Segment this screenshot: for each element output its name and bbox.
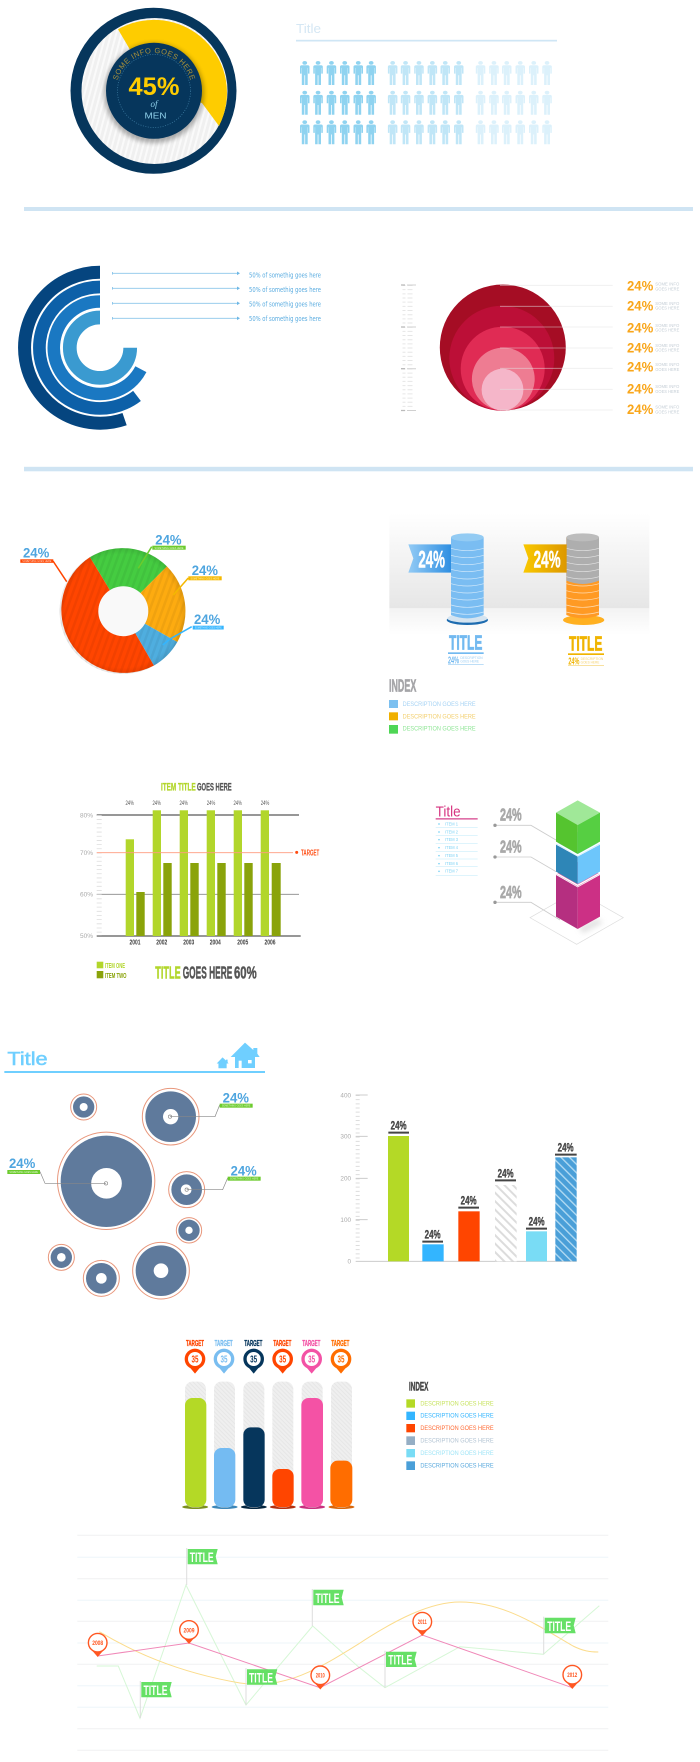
column values (391, 1118, 574, 1242)
green line (97, 1585, 599, 1718)
arc legend with arrows: 50% of somethig goes here (249, 315, 321, 323)
panel: yearly bar chart (80, 782, 319, 982)
blue ribbon (408, 544, 451, 574)
index legend: DESCRIPTION GOES HERE (420, 1426, 494, 1432)
axis: 200 (340, 1176, 351, 1183)
panel: isometric stack (436, 800, 623, 944)
target pins: 35 (250, 1355, 257, 1366)
index legend: INDEX (389, 675, 416, 695)
pink cube (556, 862, 600, 929)
callout: left: 24% (9, 1155, 36, 1171)
donut segments (60, 548, 186, 674)
percentage labels: 24% (627, 319, 654, 335)
percentage labels: 24% (627, 278, 654, 294)
leader lines (500, 285, 613, 410)
nested circles (440, 284, 566, 411)
index legend: DESCRIPTION GOES HERE (420, 1414, 494, 1420)
item list (436, 805, 478, 876)
flags: TITLE (144, 1682, 168, 1698)
index legend (406, 1380, 494, 1470)
stack labels: 24% (500, 836, 522, 856)
item list: Title (436, 805, 461, 821)
panel: concentric arc chart (25, 272, 321, 423)
target line: TARGET (301, 848, 319, 857)
year labels (130, 938, 276, 946)
flags: TITLE (547, 1618, 571, 1634)
index legend: DESCRIPTION GOES HERE (403, 702, 476, 708)
axis labels: 80% (80, 812, 93, 820)
label descriptions: SOME INFO (655, 384, 680, 390)
axis labels: 70% (80, 850, 93, 857)
big percentage: 45% (128, 73, 180, 101)
stack labels (500, 805, 522, 902)
green cube (555, 800, 601, 855)
bar values (125, 800, 269, 807)
target pins (185, 1349, 351, 1374)
target pins: 35 (337, 1355, 345, 1366)
of label: of (150, 99, 159, 109)
bubble holes (57, 1103, 193, 1284)
label descriptions: GOES HERE (655, 367, 679, 373)
yellow curve (99, 1602, 598, 1684)
callout: upper right: SOMETHING GOES HERE (222, 1104, 251, 1108)
label descriptions (655, 282, 680, 416)
men label: MEN (144, 112, 167, 120)
column values: 24% (529, 1215, 545, 1229)
percentage labels: 24% (627, 359, 654, 375)
backdrop (389, 513, 649, 635)
callout: orange: SOMETHING GOES HERE (190, 576, 220, 580)
year labels: 2004 (210, 938, 221, 946)
people group: medium (388, 61, 464, 144)
column values: 24% (498, 1166, 514, 1180)
label descriptions: SOME INFO (655, 405, 680, 411)
panel: men percentage ring (70, 8, 236, 174)
callout: right: SOMETHING GOES HERE (230, 1177, 259, 1181)
people group: light (476, 61, 552, 144)
pink line (98, 1635, 572, 1688)
bar bases (182, 1505, 354, 1509)
label descriptions: SOME INFO (655, 282, 680, 288)
index legend: DESCRIPTION GOES HERE (420, 1451, 494, 1457)
callout: blue: SOMETHING GOES HERE (195, 626, 222, 630)
label descriptions: GOES HERE (655, 389, 679, 395)
yellow ribbon (523, 544, 567, 574)
target line (97, 848, 319, 857)
callout: orange: 24% (192, 562, 219, 578)
year labels: 2001 (130, 938, 140, 946)
heading: Title (296, 22, 321, 36)
index legend: DESCRIPTION GOES HERE (403, 714, 476, 720)
flags: TITLE (249, 1669, 273, 1685)
blue title block: GOES HERE (460, 660, 479, 664)
ring: striped grey track (82, 18, 228, 164)
callout: red: 24% (23, 545, 50, 561)
bar values: 24% (125, 800, 134, 807)
target pins: 35 (220, 1355, 228, 1366)
timeline grid (77, 1535, 608, 1750)
panel: timeline line chart (77, 1535, 608, 1750)
bottom headline (155, 962, 257, 982)
target pins: 35 (308, 1355, 315, 1366)
target labels: TARGET (244, 1338, 262, 1348)
callout: upper right: 24% (223, 1090, 250, 1106)
year pins: 2009 (184, 1627, 195, 1634)
label descriptions: GOES HERE (655, 286, 679, 292)
index legend: DESCRIPTION GOES HERE (403, 727, 476, 733)
label descriptions: SOME INFO (655, 301, 680, 307)
leader lines (493, 824, 560, 920)
bubbles (51, 1091, 202, 1296)
percentage labels: 24% (627, 381, 654, 397)
callout: red: SOMETHING GOES HERE (22, 559, 51, 563)
blue title block (448, 631, 484, 666)
yellow title block: GOES HERE (581, 661, 600, 665)
axis labels: 50% (80, 933, 93, 940)
percentage labels: 24% (627, 297, 654, 313)
target pins: 35 (191, 1355, 199, 1366)
year pins: 2012 (567, 1672, 578, 1679)
column values: 24% (461, 1194, 477, 1208)
item list: ITEM 2 (445, 829, 459, 834)
axis: 300 (340, 1134, 351, 1141)
people group: dark (300, 61, 376, 144)
bar fills (185, 1398, 352, 1507)
item list: ITEM 3 (445, 837, 459, 842)
label descriptions: SOME INFO (655, 343, 680, 349)
callout: orange (173, 562, 222, 595)
arc chart (25, 272, 141, 423)
year labels: 2002 (156, 938, 167, 946)
percentage labels: 24% (627, 401, 654, 417)
ring: yellow progress segment (118, 20, 227, 126)
panel: column chart (340, 1092, 577, 1266)
target labels (186, 1338, 349, 1348)
arc legend with arrows: 50% of somethig goes here (249, 300, 321, 308)
panel: people pictogram (296, 22, 557, 144)
item list: ITEM 1 (445, 821, 459, 826)
panel: cylinder comparison (389, 513, 649, 734)
label descriptions: SOME INFO (655, 362, 680, 368)
item list: ITEM 6 (445, 861, 459, 866)
label descriptions: GOES HERE (655, 410, 679, 416)
blue ribbon: 24% (418, 547, 445, 574)
flags: TITLE (190, 1549, 214, 1565)
target labels: TARGET (215, 1338, 233, 1348)
year pins: 2008 (92, 1640, 103, 1647)
bar legend: ITEM ONE (105, 963, 125, 970)
year labels: 2005 (237, 938, 248, 946)
index legend: INDEX (409, 1380, 429, 1394)
label descriptions: GOES HERE (655, 306, 679, 312)
label descriptions: GOES HERE (655, 328, 679, 334)
panel: bubble chart (4, 1043, 265, 1299)
stack labels: 24% (500, 882, 522, 902)
label descriptions: GOES HERE (655, 348, 679, 354)
target labels: TARGET (186, 1338, 204, 1348)
item list: ITEM 7 (445, 869, 459, 874)
callout: red (20, 545, 67, 582)
column caps (388, 1133, 577, 1242)
icon: houses (217, 1043, 260, 1068)
callout: green: SOMETHING GOES HERE (154, 546, 184, 550)
stack labels: 24% (500, 805, 522, 825)
yellow title block: TITLE (569, 633, 602, 656)
grid lines (97, 815, 301, 936)
blue title block: DESCRIPTION (460, 656, 483, 660)
column values: 24% (558, 1141, 574, 1155)
callout: green: 24% (155, 531, 182, 547)
axis: 0 (347, 1259, 351, 1266)
panel: nested circles chart (401, 278, 680, 417)
yellow title block: DESCRIPTION (581, 657, 604, 661)
dark bars (136, 863, 281, 936)
orange cylinder (563, 533, 604, 625)
bottom headline: GOES HERE (183, 962, 232, 982)
blue cube (555, 832, 601, 885)
yellow title block: 24% (568, 656, 579, 667)
target labels: TARGET (273, 1338, 291, 1348)
column values: 24% (425, 1228, 441, 1242)
heading: Title (7, 1048, 48, 1069)
chart title: ITEM TITLE (161, 782, 196, 794)
light bars (126, 810, 269, 936)
item list: ITEM 5 (445, 853, 459, 858)
bar values: 24% (233, 800, 242, 807)
axis: 100 (340, 1217, 351, 1224)
curved caption: SOME INFO GOES HERE (113, 48, 196, 80)
callout: right: 24% (231, 1162, 257, 1178)
bubble outlines (48, 1088, 205, 1299)
bar tracks (185, 1382, 352, 1507)
item list: ITEM 4 (445, 845, 459, 850)
bar values: 24% (152, 800, 161, 807)
percentage labels (627, 278, 654, 417)
year labels: 2003 (183, 938, 194, 946)
axis: 400 (340, 1092, 351, 1099)
index legend (389, 675, 476, 734)
bar values: 24% (179, 800, 188, 807)
callout: green (138, 531, 186, 568)
index legend: DESCRIPTION GOES HERE (420, 1439, 494, 1445)
bottom headline: TITLE (155, 962, 181, 982)
yellow ribbon: 24% (534, 547, 561, 574)
bottom headline: 60% (234, 962, 257, 982)
label descriptions: SOME INFO (655, 323, 680, 329)
column values: 24% (391, 1118, 407, 1132)
chart title: GOES HERE (197, 782, 232, 794)
callout: left: SOMETHING GOES HERE (9, 1170, 38, 1174)
axis labels (80, 812, 93, 940)
bar values: 24% (261, 800, 269, 807)
flags: TITLE (316, 1590, 340, 1606)
index legend: DESCRIPTION GOES HERE (420, 1401, 494, 1407)
axis labels: 60% (80, 892, 93, 898)
blue title block: 24% (448, 655, 459, 666)
arc legend with arrows (112, 272, 321, 323)
bar legend (97, 962, 127, 980)
arc legend with arrows: 50% of somethig goes here (249, 272, 321, 280)
panel: target pill bars (182, 1338, 494, 1509)
axis (340, 1092, 577, 1266)
arc legend with arrows: 50% of somethig goes here (249, 286, 321, 294)
percentage labels: 24% (627, 339, 654, 355)
target labels: TARGET (331, 1338, 349, 1348)
callout: upper right (168, 1090, 253, 1118)
panel: donut chart (20, 531, 224, 674)
year pins (88, 1612, 582, 1690)
blue title block: TITLE (449, 631, 482, 654)
bar legend: ITEM TWO (105, 973, 127, 980)
flags: TITLE (388, 1652, 412, 1668)
year labels: 2006 (264, 938, 276, 946)
blue cylinder (447, 533, 488, 625)
scale ticks (401, 285, 416, 411)
index legend: DESCRIPTION GOES HERE (420, 1464, 494, 1470)
year pins: 2010 (316, 1673, 325, 1680)
target pins: 35 (279, 1355, 286, 1366)
callout: left (7, 1155, 108, 1185)
ring: navy outer circle (70, 8, 236, 174)
callout: blue: 24% (194, 611, 221, 627)
callout: blue (163, 611, 224, 645)
ring: navy centre (106, 43, 202, 139)
flags (140, 1548, 576, 1718)
year pins: 2011 (418, 1619, 427, 1626)
target labels: TARGET (302, 1338, 320, 1348)
callout: right (185, 1162, 261, 1191)
base plane (530, 891, 623, 944)
bar values: 24% (207, 800, 215, 807)
columns (388, 1136, 577, 1261)
yellow title block (568, 633, 604, 667)
